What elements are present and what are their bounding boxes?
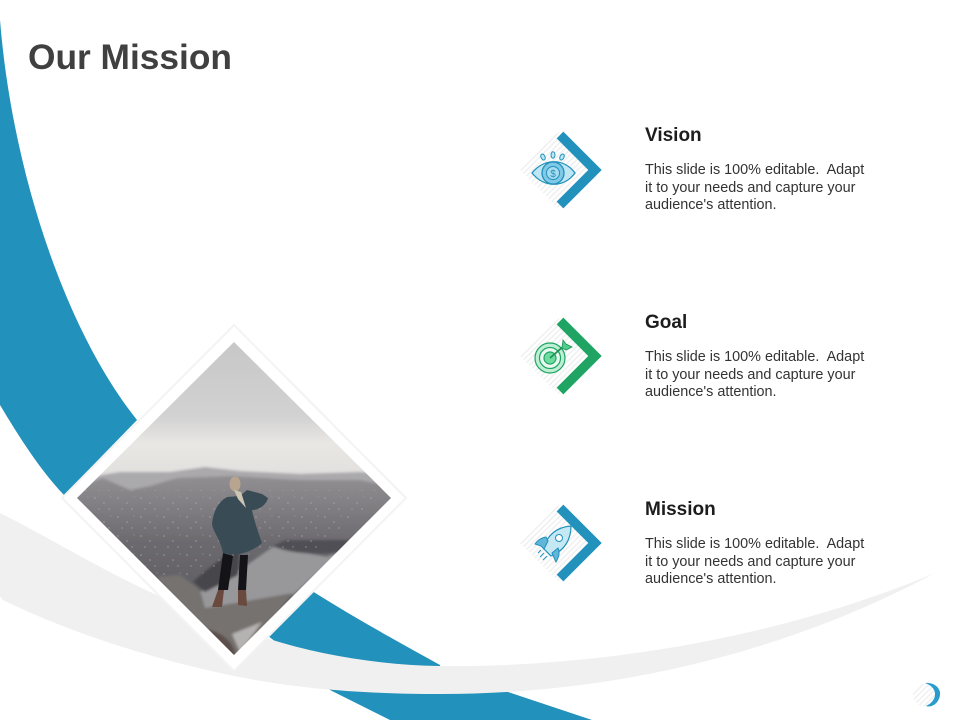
- title: Our Mission: [28, 38, 232, 77]
- text block: Goal: [645, 312, 864, 400]
- photo frame: [62, 325, 406, 671]
- heading: Vision: Vision: [645, 125, 702, 146]
- photo: woman overlooking a valley: [77, 342, 391, 655]
- body: Goal: This slide is 100% editable. Adapt it to your needs and capture your audience's attention.: [645, 349, 864, 400]
- icon: vision eye: $: [550, 169, 556, 180]
- icon: goal target: [520, 318, 602, 394]
- heading: Goal: Goal: [645, 312, 687, 333]
- body: Vision: This slide is 100% editable. Adapt it to your needs and capture your audience's attention.: [645, 162, 864, 213]
- bottom-right page mark: [913, 683, 940, 706]
- person: [212, 476, 268, 607]
- grey swoosh: [0, 513, 935, 694]
- heading: Mission: Mission: [645, 499, 716, 520]
- text block: Vision: [645, 125, 864, 213]
- icon: vision eye: [520, 132, 602, 208]
- blue swoosh: [0, 20, 592, 720]
- body: Mission: This slide is 100% editable. Adapt it to your needs and capture your audience's attention.: [645, 536, 864, 587]
- text block: Mission: [645, 499, 864, 587]
- icon: mission rocket: [520, 504, 602, 582]
